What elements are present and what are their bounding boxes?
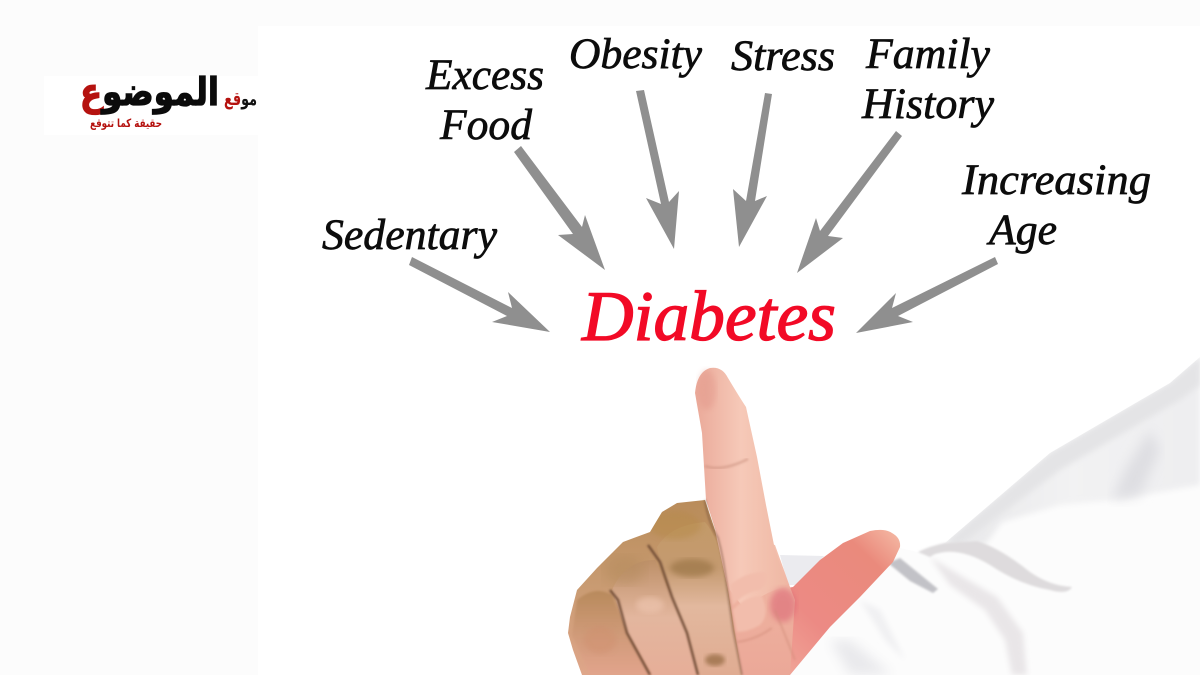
back of hand [568,500,745,675]
photo: hand pointing up [568,368,900,675]
palm folds [737,610,795,660]
label: Obesity: Obesity [569,31,703,78]
middle finger [657,522,742,675]
sleeve edge [970,360,1200,523]
photo: shirt sleeve [780,357,1200,675]
curled fingers on palm [730,572,767,632]
logo [44,70,258,135]
arrow: Obesity [636,90,679,249]
lower shirt wrinkles [835,640,883,675]
index finger [695,368,787,610]
thumb [750,530,900,675]
shirt fold: cuff [888,558,938,593]
label: Increasing Age [961,157,1151,254]
collar underside shading [930,557,1027,675]
page background [258,26,1200,675]
palm [715,530,795,675]
ring finger [612,560,698,675]
label: Family History: Family [865,31,991,78]
label: Excess Food [425,52,544,149]
thumb base flush [770,588,796,622]
shirt body [780,357,1200,675]
label: Increasing Age: Increasing [961,157,1151,204]
arrow: Increasing Age [856,257,998,333]
label: Excess Food: Excess [425,52,544,99]
label: Excess Food: Food [439,102,532,149]
knuckle and skin shading [584,511,725,666]
label: Family History [861,31,995,128]
finger gaps [610,500,742,675]
arrow: Excess Food [514,146,605,270]
fingertip flush [698,370,716,410]
sleeve wrinkle [1116,438,1158,500]
logo small word: موقع [224,88,257,110]
logo tagline: حقيقة كما تتوقع [90,116,162,131]
label: Stress: Stress [731,33,835,80]
arrow: Stress [733,93,772,247]
label: Family History: History [861,81,995,128]
heading: Diabetes: Diabetes [581,278,836,356]
shirt back panel behind thumb [780,555,824,585]
arrow: Sedentary [409,257,550,332]
index crease [705,459,748,468]
label: Sedentary: Sedentary [322,212,498,259]
pinky finger [572,591,652,675]
logo main word: الموضوع [80,70,219,114]
arrow: Family History [797,131,902,273]
label: Increasing Age: Age [986,207,1057,254]
upper sleeve shading [968,389,1199,543]
shirt fold: collar [918,541,1072,592]
